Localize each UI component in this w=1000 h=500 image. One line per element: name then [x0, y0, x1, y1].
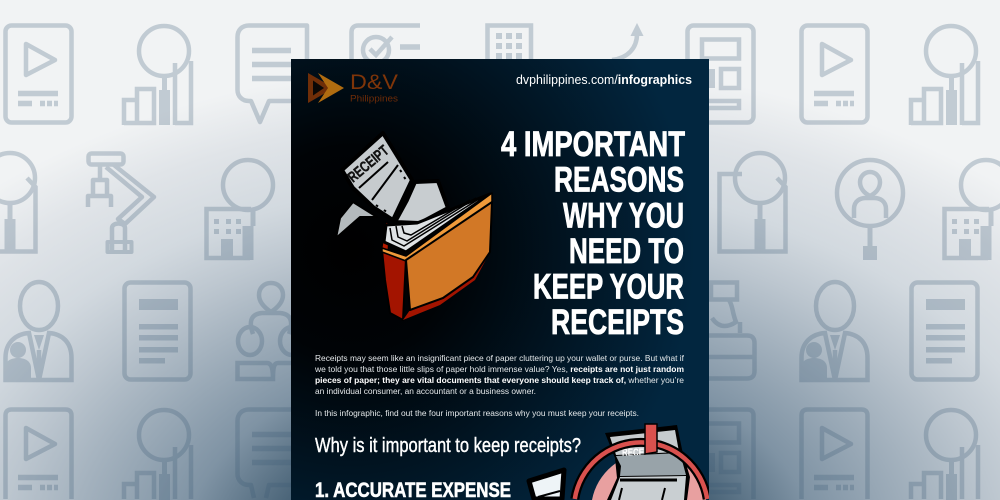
title: NEED TO — [569, 232, 684, 271]
intro paragraph: Receipts may seem like an insignificant piece of paper cluttering up your wallet or purse. But what if — [315, 353, 685, 363]
icon: speech bubble, row 4 — [238, 410, 307, 498]
front receipt sheet — [342, 133, 412, 220]
website url: dvphilippines.com/infographics — [516, 72, 692, 87]
illustration: receipt in red magnifier: RECE — [622, 447, 644, 459]
back receipt sheet — [395, 181, 448, 223]
icon: building magnifier, row 2 — [206, 160, 273, 260]
spine top strip — [382, 222, 390, 250]
illustration: folder with receipts — [336, 133, 492, 320]
icon: business person, row 3 — [5, 282, 72, 381]
folder rim — [382, 193, 492, 261]
folder pages — [384, 194, 490, 252]
icon: growth arrow — [612, 23, 644, 60]
title: REASONS — [554, 160, 684, 200]
icon: document magnifier, row 2 left — [0, 153, 36, 253]
icon: layout card, row 4 — [687, 410, 754, 499]
folder cover — [406, 202, 492, 310]
icon: building magnifier, row 2 right — [944, 160, 1000, 260]
icon: person in magnifier — [837, 160, 903, 260]
title: RECEIPTS — [551, 303, 684, 342]
title: 4 IMPORTANT — [501, 125, 685, 164]
icon: magnifier chart, row 4 right — [911, 410, 978, 500]
illustration: paper scrap — [529, 470, 564, 499]
intro paragraph: pieces of paper; they are vital documents that everyone should keep track of, whether you’re — [315, 375, 684, 385]
intro paragraph — [314, 353, 685, 396]
icon: checkmark card — [352, 26, 420, 63]
folder spine — [382, 250, 406, 320]
intro second paragraph: In this infographic, find out the four important reasons why you must keep your receipts. — [315, 408, 639, 418]
section heading: Why is it important to keep receipts? — [315, 435, 581, 457]
receipt label: RECEIPT — [345, 142, 392, 186]
illustration: receipt in red magnifier — [575, 424, 707, 500]
icon: business person, row 3 right — [801, 282, 868, 381]
logo: D&V Philippines: D&V — [350, 71, 398, 94]
title — [501, 125, 685, 342]
icon: video document, row 4 right — [802, 410, 868, 499]
icon: hand stamp — [700, 282, 754, 378]
title: KEEP YOUR — [533, 268, 684, 306]
icon: video document, row 1 — [6, 26, 72, 122]
intro paragraph: we told you that those little slips of paper hold immense value? Yes, receipts are not just random — [314, 364, 684, 374]
logo: D&V Philippines: Philippines — [350, 94, 398, 104]
icon: video document, row 4 — [6, 410, 72, 499]
icon: magnifier chart, row 1 — [124, 26, 191, 125]
icon: magnifier chart, row 4 — [124, 410, 191, 500]
folder lower lip — [403, 252, 490, 320]
small paper scrap — [336, 202, 377, 238]
icon: report document, row 3 right — [912, 282, 978, 380]
icon: robot arm — [88, 154, 154, 252]
icon: video document, row 1 right — [802, 26, 868, 122]
icon: office building — [488, 26, 531, 62]
title: WHY YOU — [563, 196, 684, 236]
icon: magnifier chart, row 1 right — [911, 26, 978, 125]
icon: report document, row 3 — [124, 282, 190, 380]
icon: document magnifier, row 2 right — [720, 153, 786, 253]
panel: infographic preview — [291, 59, 709, 500]
icon: layout card, row 1 — [687, 26, 754, 122]
icon: speech bubble, row 1 — [238, 26, 307, 122]
logo: D&V Philippines — [308, 71, 398, 104]
icon: group of people — [238, 283, 305, 379]
intro paragraph: an individual consumer, an accountant or a business owner. — [315, 386, 536, 396]
